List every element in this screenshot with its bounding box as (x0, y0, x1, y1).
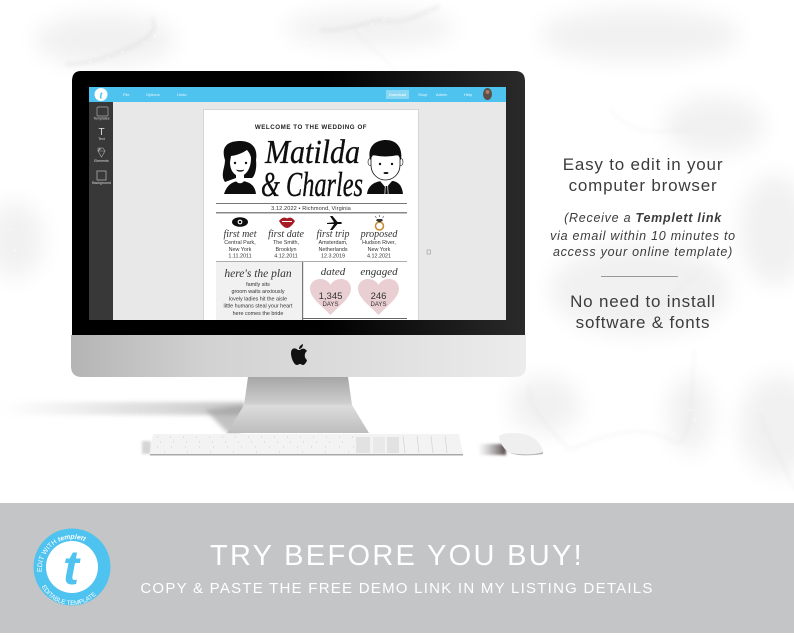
toolbar: Undo (177, 92, 187, 97)
desk shadow of monitor (0, 402, 245, 433)
counter: dated: 1,345 (319, 291, 342, 302)
counter: engaged (358, 266, 399, 315)
timeline: first met: New York (229, 247, 252, 253)
side text: easy to edit: Easy to edit in your (563, 155, 723, 174)
monitor bezel (72, 71, 525, 335)
side text: no need to install (570, 292, 716, 332)
timeline: first date: first date (268, 229, 304, 240)
timeline: first trip: first trip (316, 229, 350, 240)
toolbar: File (123, 92, 130, 97)
sidebar: Background (92, 181, 111, 185)
side text: templett link note (550, 211, 736, 259)
sidebar: Templates (94, 116, 110, 120)
timeline: first trip (316, 216, 350, 260)
monitor stand (227, 377, 369, 433)
timeline: first date: 4.12.2011 (274, 254, 298, 260)
timeline: first met: 1.11.2011 (228, 254, 252, 260)
document heading: WELCOME TO THE WEDDING OF (255, 124, 367, 131)
names script (261, 134, 363, 204)
panel: here's the plan: here's the plan (224, 268, 292, 280)
panel: here's the plan: lovely ladies hit the aisle (229, 296, 287, 302)
timeline: first met: Central Park, (224, 240, 256, 246)
timeline: first date: The Smith, (273, 240, 300, 246)
banner heading: TRY BEFORE YOU BUY! (210, 540, 584, 572)
sidebar: Elements (94, 159, 109, 163)
timeline: first date: Brooklyn (276, 247, 296, 253)
timeline: proposed (360, 215, 398, 260)
side text: templett link note: via email within 10 minutes to (550, 229, 736, 243)
banner subheading: COPY & PASTE THE FREE DEMO LINK IN MY LISTING DETAILS (140, 580, 654, 597)
sidebar: T (98, 127, 105, 138)
editor screen (89, 87, 506, 320)
icon: apple logo (291, 344, 307, 365)
monitor (71, 71, 526, 433)
timeline: first trip: 12.3.2019 (321, 254, 345, 260)
icon: bride portrait (223, 141, 256, 194)
timeline: first met: first met (223, 229, 257, 240)
sidebar: Text (98, 137, 105, 141)
panel: here's the plan (216, 262, 302, 320)
names script: Matilda (264, 134, 360, 171)
side text: no need to install: software & fonts (576, 313, 710, 332)
side text: templett link note: (Receive a Templett link (564, 211, 722, 225)
counter: engaged: 246 (371, 291, 386, 302)
counter: dated (310, 266, 351, 315)
bottom banner (0, 503, 794, 633)
keyboard (142, 434, 463, 456)
badge: edit with templett (34, 528, 110, 606)
toolbar: Download (389, 93, 406, 97)
timeline: proposed: New York (368, 247, 391, 253)
panel: here's the plan: family sits (246, 282, 270, 288)
sidebar (89, 102, 113, 320)
timeline: first trip: Netherlands (318, 247, 348, 253)
user avatar (483, 88, 492, 100)
timeline: first date (268, 218, 304, 260)
toolbar: Help (464, 92, 473, 97)
date and place: 3.12.2022 • Richmond, Virginia (271, 206, 352, 212)
timeline: proposed: Hudson River, (362, 240, 396, 246)
toolbar: Options (146, 92, 160, 97)
toolbar: Admin (436, 92, 447, 97)
side text: templett link note: access your online template) (553, 245, 733, 259)
document page (203, 109, 419, 320)
counter: dated: DAYS (323, 302, 338, 308)
names script: & Charles (261, 165, 363, 204)
counter: dated: dated (321, 266, 346, 278)
monitor chin (71, 335, 526, 377)
timeline: proposed: proposed (360, 229, 398, 240)
side text: easy to edit (563, 155, 723, 195)
panel: here's the plan: little humans steal your heart (224, 304, 293, 310)
toolbar (89, 87, 506, 102)
side text: no need to install: No need to install (570, 292, 716, 311)
panel: here's the plan: groom waits anxiously (231, 289, 285, 295)
counter: engaged: engaged (360, 266, 398, 278)
toolbar: t (99, 90, 103, 102)
timeline: proposed: 4.12.2021 (367, 254, 391, 260)
timeline: first trip: Amsterdam, (318, 240, 348, 246)
badge: edit with templett: EDITABLE TEMPLATE (42, 584, 96, 605)
badge: edit with templett: t (63, 542, 81, 595)
panel: here's the plan: here comes the bride (233, 311, 283, 317)
counter: engaged: DAYS (371, 302, 386, 308)
marble background (0, 0, 794, 503)
side text: easy to edit: computer browser (569, 176, 717, 195)
toolbar: Shop (418, 92, 428, 97)
timeline: first met (223, 217, 257, 260)
mouse (478, 433, 543, 455)
icon: groom portrait (367, 140, 403, 194)
badge: edit with templett: EDIT WITH templett (37, 534, 86, 572)
